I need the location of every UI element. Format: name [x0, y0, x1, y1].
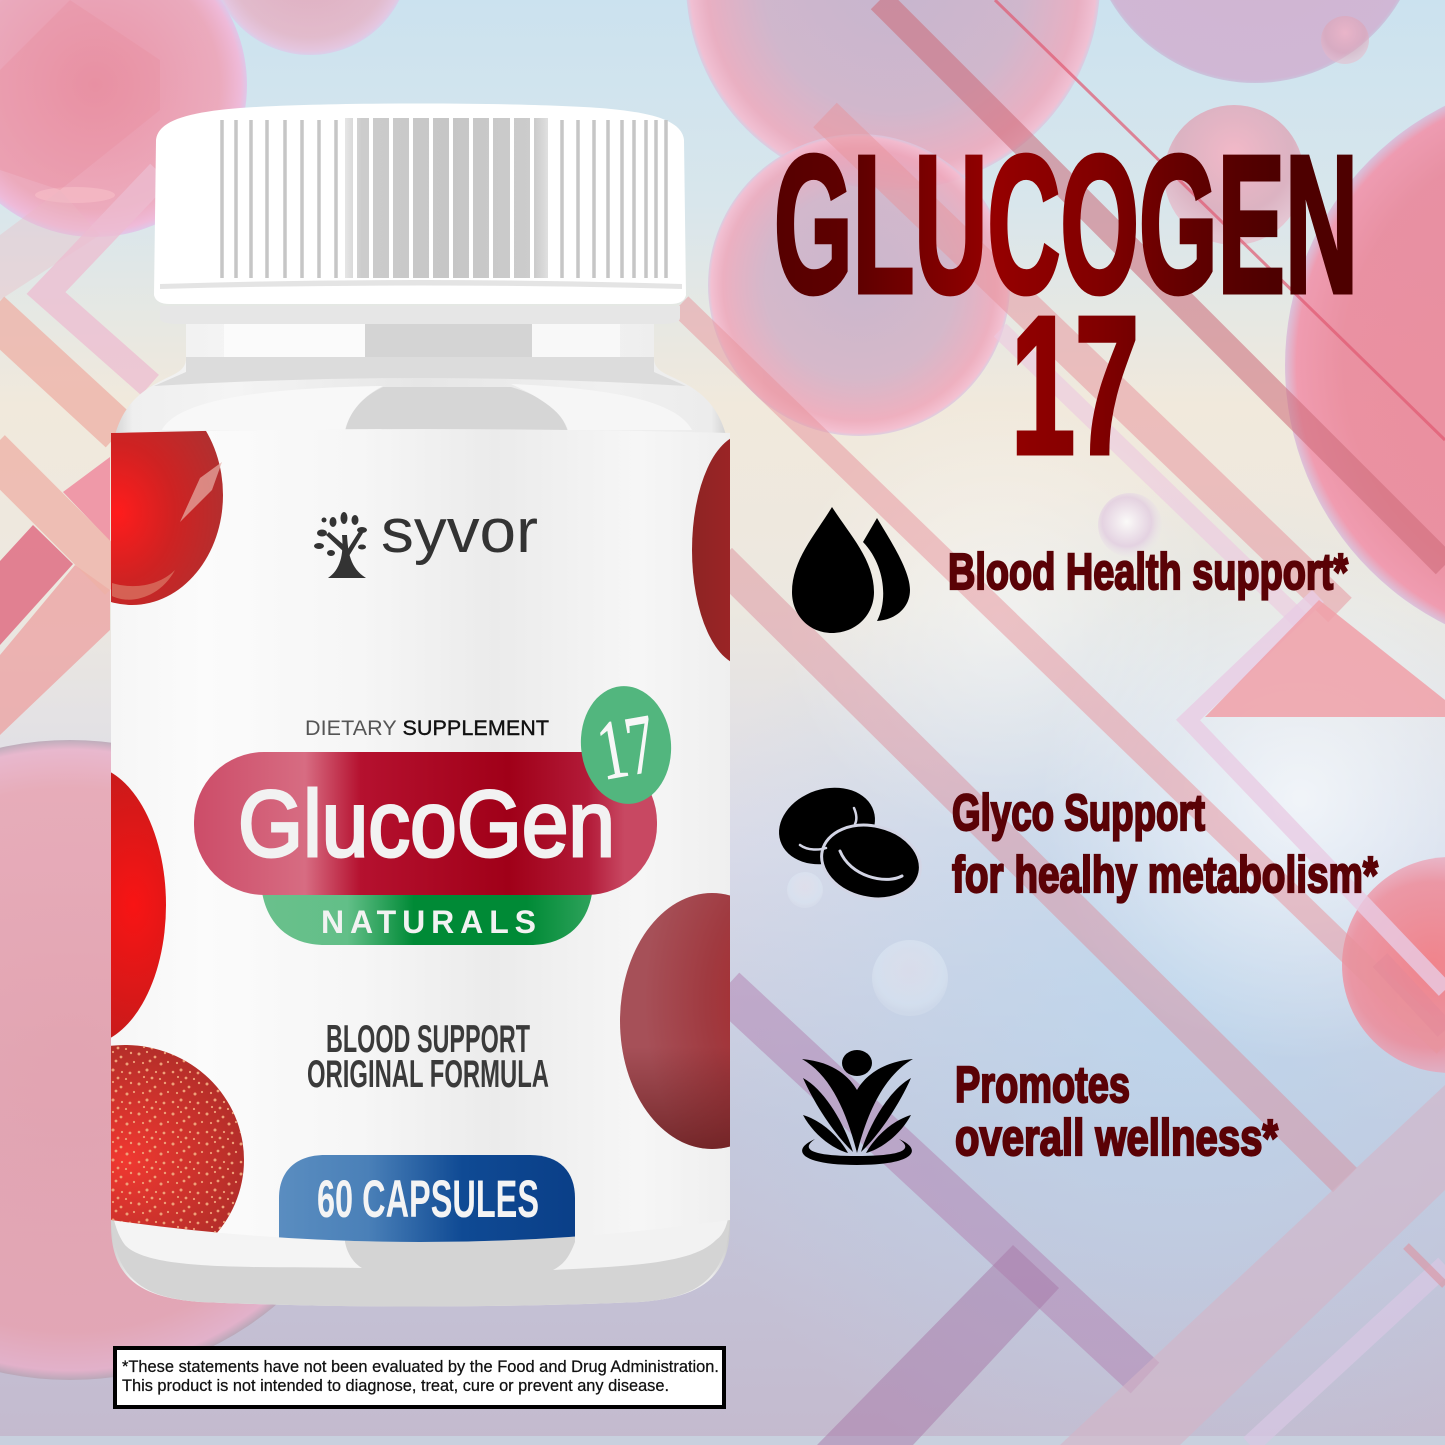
- wordmark: syvor: [381, 497, 538, 566]
- blue capsules tab: [279, 1155, 575, 1242]
- text: blood support original formula: [308, 1025, 548, 1088]
- text: dietary supplement: DIETARY SUPPLEMENT: [305, 716, 549, 740]
- text: promotes overall wellness: Promotes: [955, 1056, 1130, 1113]
- icon: wellness figure: [802, 1050, 913, 1165]
- disclaimer text: *These statements have not been evaluated by the Food and Drug Administration.: [122, 1358, 719, 1376]
- bottle body: [111, 306, 730, 1306]
- cap: [154, 104, 686, 304]
- red glucogen pill: [194, 752, 657, 895]
- text: 17: 17: [591, 697, 662, 798]
- title: [774, 115, 1358, 495]
- icon: blood drops: [792, 507, 910, 633]
- icon: blood cells: [769, 776, 928, 908]
- text: naturals: NATURALS: [321, 904, 536, 940]
- disclaimer text: [122, 1358, 719, 1395]
- label: [111, 429, 730, 1242]
- label art: blood cells: [111, 430, 730, 1232]
- text: glucogen: GlucoGen: [238, 771, 615, 876]
- benefit 3: [802, 1050, 1278, 1166]
- text: glyco support: [952, 784, 1378, 903]
- benefit 1: [792, 507, 1348, 633]
- green 17 badge: [580, 686, 672, 804]
- text: 60 capsules: 60 CAPSULES: [317, 1170, 539, 1229]
- text: blood support original formula: ORIGINAL FORMULA: [307, 1053, 549, 1096]
- bottle: [111, 104, 730, 1306]
- benefit 2: [769, 776, 1378, 908]
- text: glyco support: Glyco Support: [952, 784, 1205, 841]
- text: promotes overall wellness: [955, 1056, 1278, 1166]
- disclaimer text: This product is not intended to diagnose, treat, cure or prevent any disease.: [122, 1377, 669, 1395]
- text: blood support original formula: BLOOD SUPPORT: [326, 1018, 530, 1061]
- green naturals pill: [262, 894, 592, 945]
- icon: tree: [314, 512, 367, 578]
- brand logo: syvor: [314, 512, 537, 578]
- title: 17: [1011, 276, 1139, 495]
- disclaimer box: [115, 1348, 724, 1407]
- text: promotes overall wellness: overall wellness*: [955, 1109, 1278, 1166]
